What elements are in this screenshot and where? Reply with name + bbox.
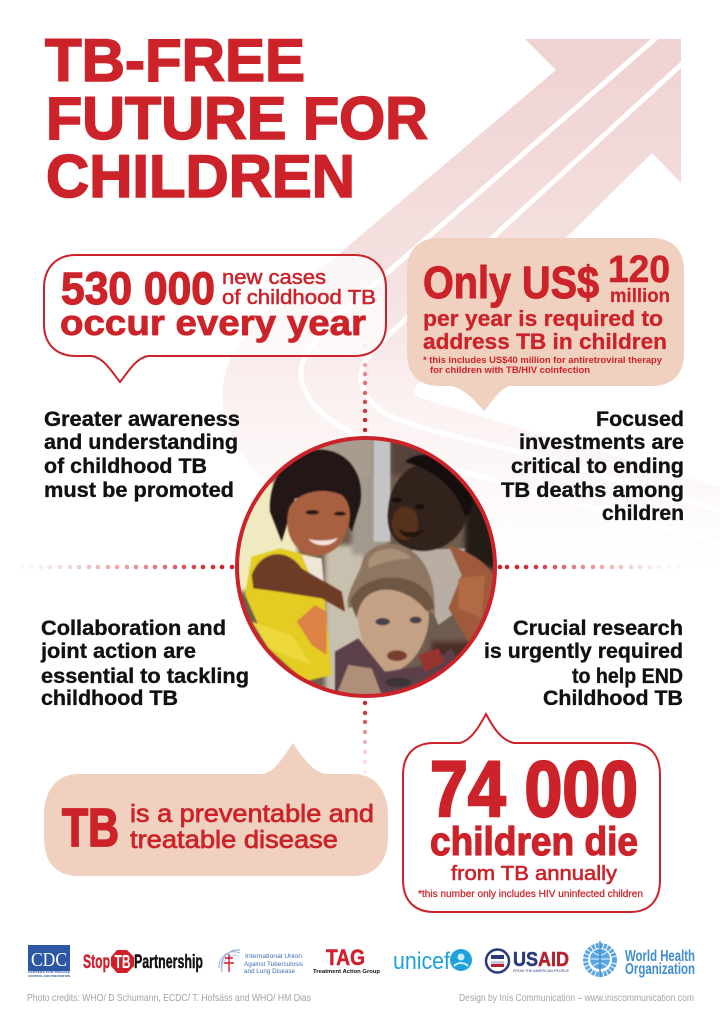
logo: International Union Against Tuberculosis and Lung Disease: International Union [245,953,302,960]
text: collaboration: childhood TB [41,687,178,710]
logo: USAID: USAID [513,949,569,971]
logo: Stop TB Partnership: Stop [83,952,110,973]
logo: TAG: TAG [326,945,365,970]
text: focused investments [501,408,684,525]
title: FUTURE FOR [46,85,428,152]
text: collaboration: essential to tackling [41,665,249,688]
logo: Stop TB Partnership: TB [114,952,130,972]
text: greater awareness: Greater awareness [44,408,240,431]
text: focused investments: Focused [596,408,684,431]
callout: Only US$120 million: for children with TB/HIV coinfection [430,365,590,376]
title: CHILDREN [46,143,355,210]
callout: 530 000 new cases [44,255,386,382]
photo of three children in a red circle [225,435,505,705]
logo: CDC [28,945,70,978]
callout: 530 000 new cases: 530 000 [61,263,215,314]
text: focused investments: critical to ending [511,455,684,478]
callout: Only US$120 million: * this includes US$40 million for antiretroviral therapy [423,355,663,366]
logo: TAG [313,945,381,975]
text: greater awareness: must be promoted [44,479,234,502]
logo: International Union Against Tuberculosis and Lung Disease: and Lung Disease [244,968,295,975]
text: greater awareness: and understanding [44,431,238,454]
callout: 530 000 new cases: of childhood TB [222,287,376,309]
text: collaboration: joint action are [40,640,196,663]
logo: CDC: CENTERS FOR DISEASE [28,970,70,974]
callout: Only US$120 million: 120 [608,249,670,291]
callout: 74 000 children die: children die [430,820,638,864]
text: crucial research: is urgently required [484,640,683,663]
logo: CDC: CDC [31,949,67,971]
callout: 74 000 children die [403,714,660,912]
callout: 530 000 new cases: occur every year [60,302,366,343]
background arrow [222,37,720,640]
text: crucial research: Crucial research [513,617,683,640]
text: crucial research [484,617,683,710]
text: collaboration [40,617,249,710]
text: crucial research: Childhood TB [543,687,683,710]
logo: unicef: unicef [393,948,450,975]
logo: World Health Organization: Organization [625,961,695,978]
callout: TB is preventable: TB [62,798,119,858]
callout: 530 000 new cases: new cases [222,267,326,289]
logo: Stop TB Partnership: Partnership [134,952,203,973]
callout: Only US$120 million: million [610,286,670,307]
callout: Only US$120 million: per year is required to [423,306,663,331]
logo: USAID [486,949,569,973]
logo: CDC: CONTROL AND PREVENTION [28,974,70,978]
callout: TB is preventable: is a preventable and [130,800,374,828]
callout: Only US$120 million: Only US$ [423,257,599,308]
callout: Only US$120 million: address TB in children [423,329,667,354]
logo: Stop TB Partnership [83,950,203,973]
logo: World Health Organization [586,941,695,978]
text: focused investments: investments are [519,431,684,454]
callout: TB is preventable: treatable disease [130,826,338,854]
callout: 74 000 children die: 74 000 [430,744,638,833]
logo: TAG: Treatment Action Group [313,969,381,975]
callout: TB is preventable [44,743,388,876]
text: greater awareness: of childhood TB [44,455,207,478]
title [45,27,428,210]
title: TB-FREE [45,27,305,94]
callout: 74 000 children die: *this number only includes HIV uninfected children [418,889,643,900]
text: focused investments: children [602,502,684,525]
callout: Only US$120 million [407,238,684,411]
logo row [28,941,695,978]
text: collaboration: Collaboration and [41,617,226,640]
logo: International Union Against Tuberculosis and Lung Disease [219,950,304,975]
text: greater awareness [44,408,240,502]
logo: International Union Against Tuberculosis and Lung Disease: Against Tuberculosis [244,961,304,968]
text: focused investments: TB deaths among [501,479,684,502]
dotted cross lines [20,335,680,774]
text: crucial research: to help END [572,665,683,688]
logo: USAID: FROM THE AMERICAN PEOPLE [513,968,569,973]
callout: 74 000 children die: from TB annually [451,862,618,885]
photo credits: Photo credits: WHO/ D Schumann, ECDC/ T. Hofsäss and WHO/ HM Dias [27,992,311,1004]
